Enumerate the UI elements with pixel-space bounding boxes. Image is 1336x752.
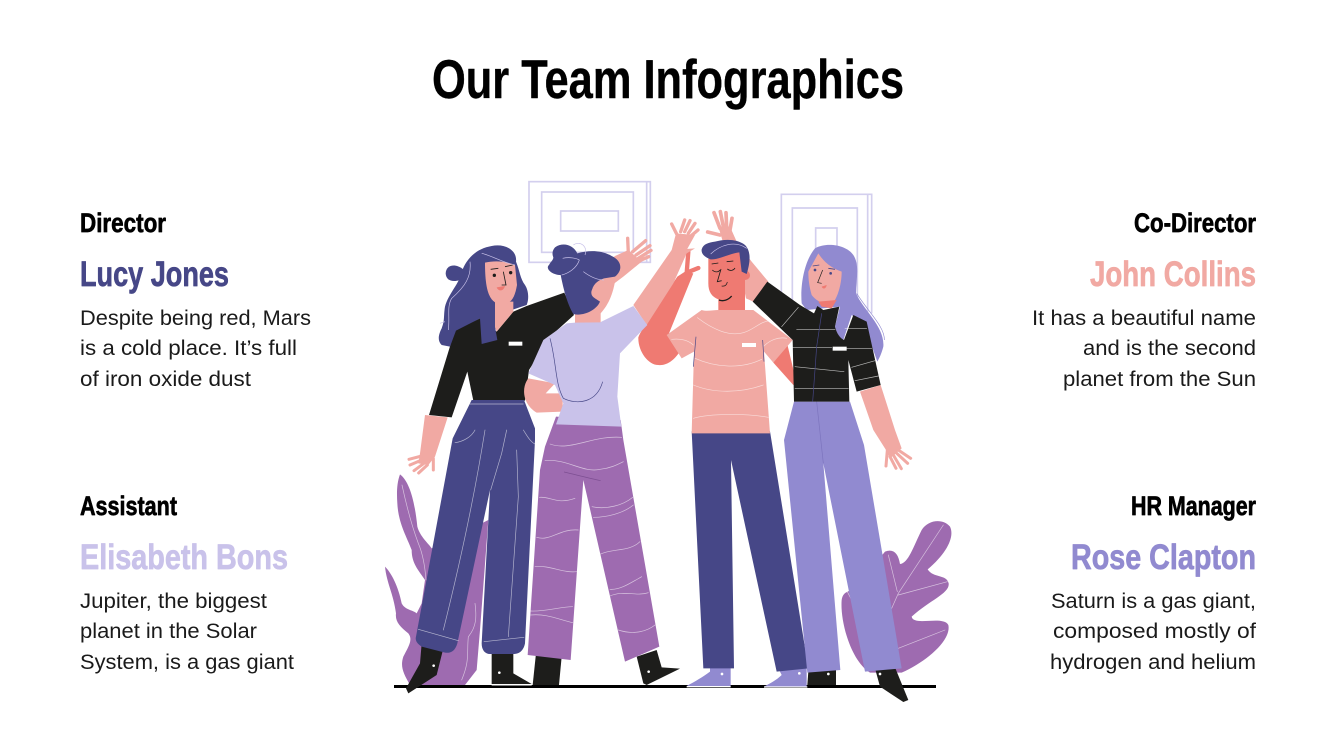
role: HR Manager: HR Manager: [1131, 491, 1256, 521]
person: Lucy Jones: [406, 238, 651, 693]
plant: left: [385, 474, 488, 685]
description: Rose Clapton: Saturn is a gas giant,: [1051, 590, 1256, 613]
hair: [439, 245, 528, 347]
pink shirt: [667, 310, 793, 433]
description: Elisabeth Bons: Jupiter, the biggest: [80, 590, 267, 613]
description: Elisabeth Bons: System, is a gas giant: [80, 651, 294, 674]
torso and head: [753, 245, 884, 402]
head and torso: [667, 240, 797, 433]
illustration: team high five: [385, 182, 951, 702]
face and neck: [708, 250, 750, 311]
description: John Collins: It has a beautiful name: [1032, 307, 1256, 330]
description: John Collins: planet from the Sun: [1063, 368, 1256, 391]
person: second woman, back view: [524, 220, 698, 685]
description: Lucy Jones: [80, 307, 311, 391]
panel: assistant: [80, 491, 294, 674]
plant: right: [841, 521, 951, 673]
trousers: [528, 417, 659, 662]
person: Rose Clapton: [753, 245, 911, 702]
description: Rose Clapton: hydrogen and helium: [1050, 651, 1256, 674]
hair: [702, 240, 750, 274]
arm: Rose's raised arm and hand: [708, 212, 768, 302]
raised arm: [567, 238, 651, 317]
jeans: [416, 400, 535, 654]
panel: director: [80, 208, 311, 391]
panel: hr manager: [1050, 491, 1256, 674]
description: Rose Clapton: [1050, 590, 1256, 674]
description: Rose Clapton: composed mostly of: [1053, 620, 1256, 643]
shoes: [533, 650, 680, 685]
role: Director: Director: [80, 208, 166, 238]
lower arm and hand: [409, 415, 448, 473]
neck and face: [495, 302, 513, 332]
ground line: [394, 685, 936, 688]
hair: [548, 245, 620, 315]
torso and arms: [524, 243, 695, 427]
hair and face: [439, 245, 528, 347]
title: Our Team Infographics: [432, 48, 904, 110]
description: Elisabeth Bons: [80, 590, 294, 674]
description: Lucy Jones: is a cold place. It’s full: [80, 337, 297, 360]
description: Elisabeth Bons: planet in the Solar: [80, 620, 257, 643]
shoes: [687, 665, 807, 687]
shoes: [807, 667, 908, 702]
black shirt: [753, 282, 881, 402]
role: Co-Director: Co-Director: [1134, 208, 1256, 238]
description: John Collins: [1032, 307, 1256, 391]
name: Lucy Jones: Lucy Jones: [80, 255, 229, 294]
name: Elisabeth Bons: Elisabeth Bons: [80, 538, 288, 577]
shoes: [406, 643, 532, 693]
wall frame: right: [781, 194, 872, 313]
trousers: [784, 402, 902, 673]
black shirt: [429, 293, 574, 417]
wall frame: left: [529, 182, 650, 262]
role: Assistant: Assistant: [80, 491, 177, 521]
description: John Collins: and is the second: [1083, 337, 1256, 360]
person: John Collins: [667, 240, 808, 687]
description: Lucy Jones: of iron oxide dust: [80, 368, 251, 391]
name: John Collins: John Collins: [1090, 255, 1256, 294]
raised hand: [672, 220, 698, 270]
panel: co-director: [1032, 208, 1256, 391]
bun: [446, 265, 463, 281]
description: Lucy Jones: Despite being red, Mars: [80, 307, 311, 330]
face: [808, 253, 842, 304]
arm: John's raised coral arm: [638, 252, 698, 365]
trousers: [692, 431, 808, 672]
long hair back: [801, 245, 883, 362]
lower arm and hand: [860, 385, 911, 469]
name: Rose Clapton: Rose Clapton: [1071, 538, 1256, 577]
